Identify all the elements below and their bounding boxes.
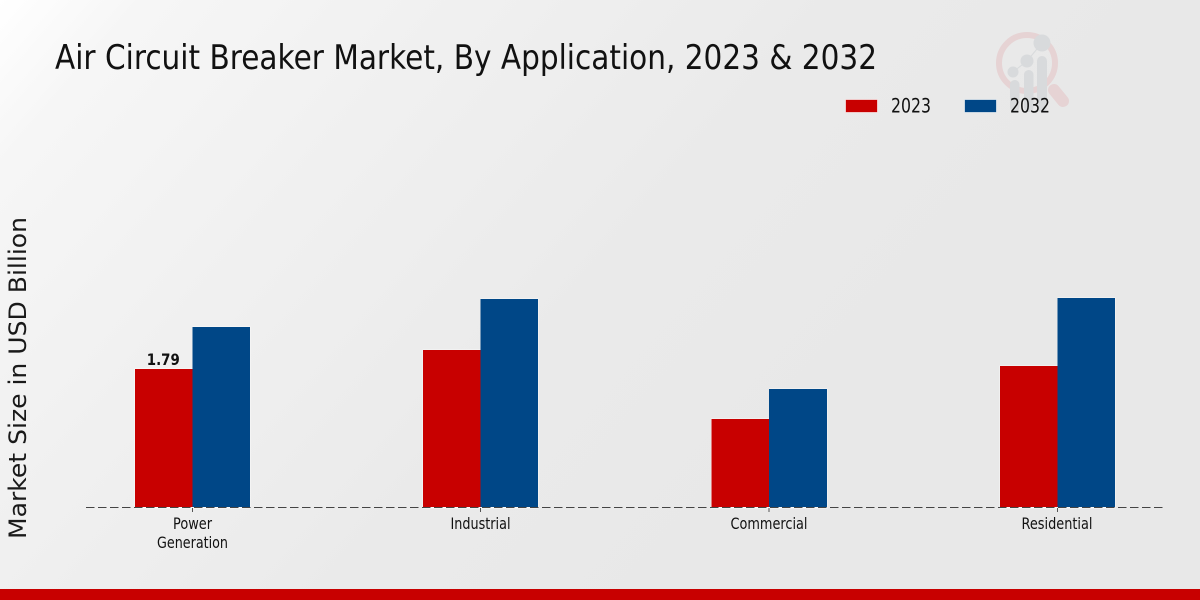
- bar chart: [86, 298, 1164, 552]
- bars: Power Generation: [134, 326, 250, 508]
- icon: watermark logo: [999, 34, 1063, 112]
- legend: 2032: 2032: [1010, 94, 1050, 118]
- bars: Commercial: [711, 388, 828, 508]
- y axis label: Market Size in USD Billion: [4, 217, 32, 539]
- legend: 2023: 2023: [891, 94, 931, 118]
- title: Air Circuit Breaker Market, By Application, 2023 & 2032: [55, 38, 877, 78]
- x axis labels: Industrial: [450, 514, 510, 533]
- x axis labels: [157, 514, 1092, 552]
- x axis labels: Residential: [1022, 514, 1092, 533]
- legend: 2032: [964, 94, 1050, 118]
- legend: 2023: [846, 94, 931, 118]
- x axis labels: Power: [173, 514, 212, 533]
- bars: Industrial: [422, 298, 538, 508]
- x axis labels: Generation: [157, 533, 228, 552]
- footer bar: [0, 589, 1200, 600]
- value label 1.79: 1.79: [147, 350, 180, 369]
- bars: Residential: [1000, 298, 1116, 508]
- x axis labels: Commercial: [730, 514, 808, 533]
- legend: [846, 94, 1050, 118]
